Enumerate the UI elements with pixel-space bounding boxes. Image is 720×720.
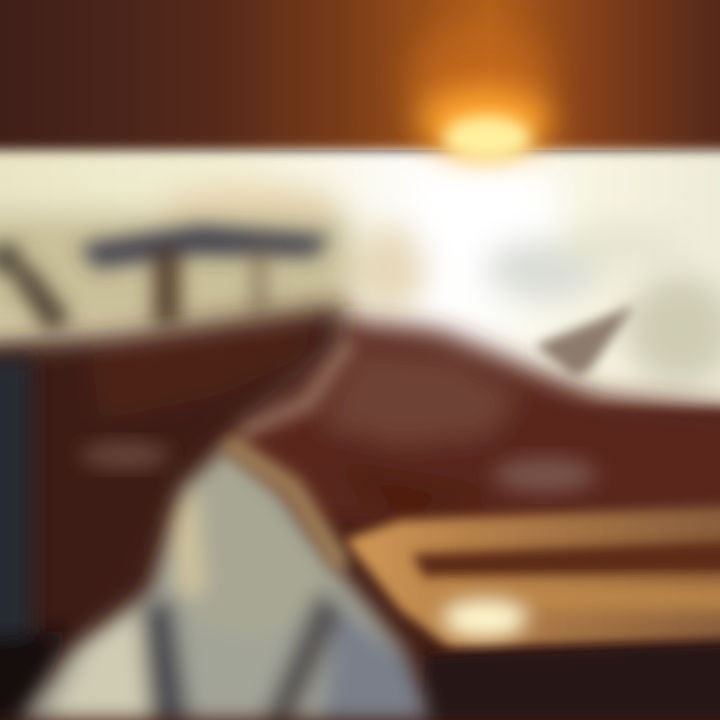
grey cloth foreground (20, 445, 430, 720)
dark base (0, 300, 720, 720)
sky band (0, 0, 720, 150)
boat bow fin (535, 305, 635, 378)
deck bright reflection (430, 585, 720, 638)
middle boat hull (215, 320, 720, 530)
hull pale patch (493, 457, 597, 493)
bottom right dark area (420, 642, 720, 720)
water haze (0, 150, 720, 385)
bright water band (0, 150, 720, 410)
sun core (443, 116, 531, 160)
cloth highlight edge (222, 335, 360, 575)
left boat hull (0, 305, 345, 720)
left dark blue edge (0, 358, 70, 720)
sky orange column (410, 20, 550, 140)
hull reflection (80, 441, 170, 469)
deck dark strip (412, 540, 720, 578)
wooden deck (345, 505, 720, 648)
sun glow (419, 88, 551, 156)
left boat railing (0, 226, 330, 332)
